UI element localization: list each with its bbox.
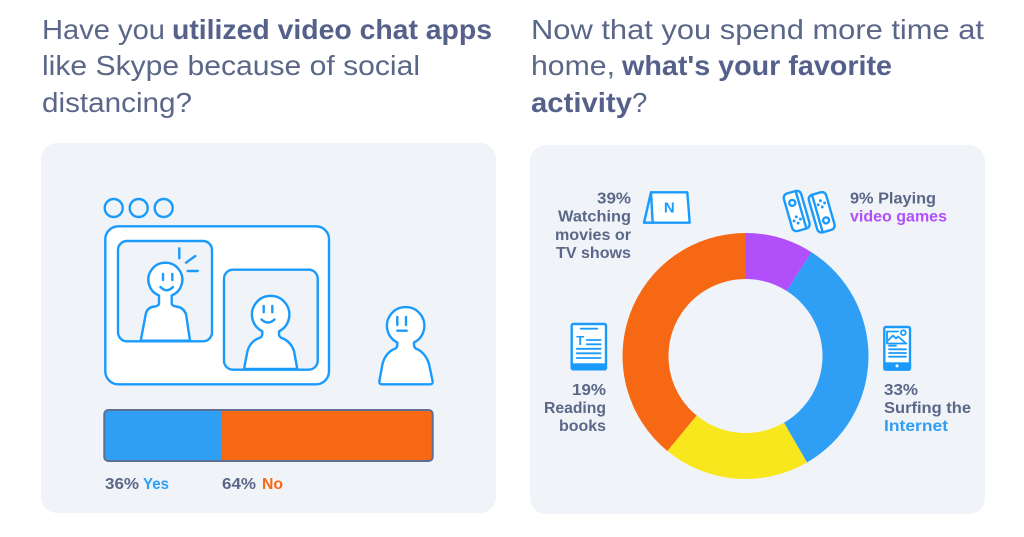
icon: game controllers (783, 190, 836, 234)
label: 9% playing video games (850, 190, 947, 226)
label: 9% playing video games: video games (850, 209, 947, 226)
label: 36% yes: Yes (143, 476, 169, 493)
icon: book (572, 324, 606, 369)
heading: favorite activity question: what's your favorite (621, 50, 892, 81)
icon: tv (644, 192, 690, 223)
label: 39% watching movies: 39% (597, 190, 631, 207)
label: 39% watching movies: movies or (555, 227, 631, 244)
panel: favorite activity (530, 145, 985, 514)
donut chart (623, 233, 868, 479)
heading: video chat question: Have you (42, 14, 165, 45)
heading: favorite activity question: ? (632, 87, 647, 118)
heading: video chat question (42, 14, 492, 118)
panel: video chat usage (41, 143, 496, 513)
label: 39% watching movies: TV shows (556, 245, 631, 262)
icon: window buttons (105, 199, 173, 217)
label: 33% surfing the internet: 33% (884, 382, 918, 399)
label: 64% no (222, 476, 283, 493)
label: 9% playing video games: 9% Playing (850, 190, 936, 207)
video frame: talking person (118, 241, 212, 341)
label: 39% watching movies: Watching (558, 209, 631, 226)
label: 19% reading books: 19% (572, 382, 606, 399)
icon: tablet (884, 327, 910, 370)
heading: favorite activity question: Now that you spend more time at (531, 14, 984, 45)
label: 33% surfing the internet: Internet (884, 418, 949, 435)
icon: book: T (576, 333, 584, 348)
video frame: listening person (224, 270, 318, 370)
label: 33% surfing the internet (884, 382, 971, 435)
illustration: person not on video (379, 307, 433, 384)
label: 36% yes: 36% (105, 476, 139, 493)
heading: video chat question: distancing? (42, 87, 192, 118)
heading: favorite activity question: activity (531, 87, 633, 118)
heading: video chat question: utilized video chat apps (172, 14, 492, 45)
icon: tv: N (664, 200, 675, 216)
stacked bar: 36% yes, 64% no (104, 410, 433, 461)
heading: video chat question: like Skype because of social (42, 50, 420, 81)
label: 19% reading books: Reading (544, 400, 606, 417)
illustration: video chat window (105, 226, 329, 384)
label: 36% yes (105, 476, 169, 493)
label: 19% reading books: books (559, 418, 606, 435)
label: 39% watching movies (555, 190, 631, 262)
heading: favorite activity question (531, 14, 984, 118)
heading: favorite activity question: home, (531, 50, 615, 81)
label: 33% surfing the internet: Surfing the (884, 400, 971, 417)
label: 64% no: 64% (222, 476, 256, 493)
label: 64% no: No (262, 476, 283, 493)
label: 19% reading books (544, 382, 606, 435)
